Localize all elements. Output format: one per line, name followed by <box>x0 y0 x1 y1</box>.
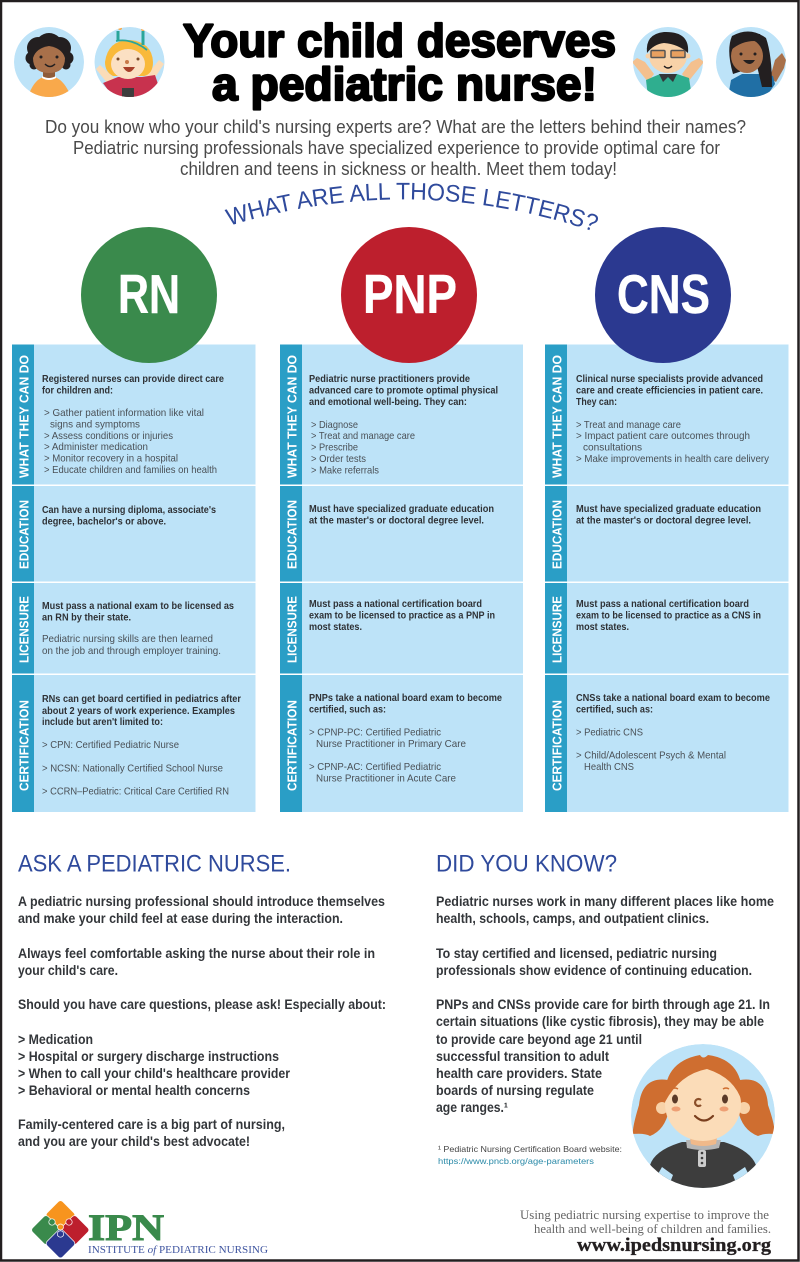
row: what they can do: > Impact patient care outcomes through <box>576 431 750 442</box>
section: ask a pediatric nurse: your child's care. <box>18 963 118 978</box>
title: Your child deserves <box>183 14 616 66</box>
section: did you know: to provide care beyond age 21 until <box>436 1032 642 1047</box>
row: education: Can have a nursing diploma, associate's <box>42 505 216 516</box>
panel: CNS column <box>545 344 788 812</box>
row: education: at the master's or doctoral degree level. <box>576 516 751 526</box>
row: what they can do: consultations <box>583 442 642 454</box>
row: certification: Nurse Practitioner in Primary Care <box>316 739 466 750</box>
row: licensure: most states. <box>309 622 362 633</box>
row: certification <box>545 675 788 812</box>
RN circle <box>81 227 217 363</box>
row: certification <box>12 675 256 812</box>
row: education: at the master's or doctoral degree level. <box>309 516 484 526</box>
row: certification: Nurse Practitioner in Acute Care <box>316 774 456 784</box>
section: ask a pediatric nurse: > When to call your child's healthcare provider <box>18 1066 291 1081</box>
footer tagline and website: health and well-being of children and families. <box>534 1222 771 1236</box>
title: a pediatric nurse! <box>212 58 597 110</box>
row: licensure: Must pass a national exam to be licensed as <box>42 601 234 612</box>
row: licensure: Must pass a national certification board <box>309 599 482 610</box>
row: what they can do: WHAT THEY CAN DO <box>18 355 32 478</box>
avatar: blonde child with headband <box>94 26 164 98</box>
row: education: EDUCATION <box>550 500 564 569</box>
section: ask a pediatric nurse: Always feel comfortable asking the nurse about their role in <box>18 946 375 961</box>
row: what they can do: Registered nurses can provide direct care <box>42 374 224 385</box>
row: certification: certified, such as: <box>309 704 386 716</box>
row: what they can do: for children and: <box>42 386 113 396</box>
row: what they can do: > Gather patient information like vital <box>44 408 204 419</box>
row: licensure: most states. <box>576 622 629 633</box>
section: did you know: health care providers. State <box>436 1066 602 1081</box>
row: what they can do: > Administer medication <box>44 442 148 453</box>
row: certification: > CPNP-PC: Certified Pediatric <box>309 728 441 738</box>
row: certification: CERTIFICATION <box>286 700 300 791</box>
section: ask a pediatric nurse: > Hospital or surgery discharge instructions <box>18 1049 279 1064</box>
logo: IPN <box>30 1199 268 1259</box>
PNP circle <box>341 227 477 363</box>
row: education: EDUCATION <box>286 500 300 569</box>
section: did you know: professionals show evidence of continuing education. <box>436 963 752 978</box>
section: ask a pediatric nurse: > Behavioral or mental health concerns <box>18 1083 250 1098</box>
row: licensure: LICENSURE <box>550 596 564 663</box>
section: did you know: health, schools, camps, and outpatient clinics. <box>436 911 709 926</box>
row: certification: about 2 years of work experience. Examples <box>42 706 235 717</box>
row: what they can do <box>12 344 256 484</box>
section: ask a pediatric nurse <box>18 850 386 1149</box>
section: ask a pediatric nurse: > Medication <box>18 1032 93 1047</box>
logo: IPN: IPN <box>88 1208 164 1249</box>
row: what they can do: Pediatric nurse practitioners provide <box>309 374 470 385</box>
row: certification: CERTIFICATION <box>550 700 564 791</box>
row: certification: > Child/Adolescent Psych & Mental <box>576 750 726 762</box>
row: licensure: Must pass a national certification board <box>576 599 749 610</box>
row: certification: > CCRN–Pediatric: Critical Care Certified RN <box>42 786 229 798</box>
footnote <box>438 1144 622 1166</box>
footnote: ¹ Pediatric Nursing Certification Board website: <box>438 1144 622 1154</box>
intro paragraph: children and teens in sickness or health. Meet them today! <box>180 158 617 179</box>
row: certification: > CPN: Certified Pediatric Nurse <box>42 740 179 751</box>
row: what they can do: Clinical nurse specialists provide advanced <box>576 374 763 385</box>
row: certification: Health CNS <box>584 762 634 773</box>
row: what they can do: WHAT THEY CAN DO <box>550 355 564 478</box>
row: education: degree, bachelor's or above. <box>42 516 166 528</box>
row: education <box>280 486 523 582</box>
section: did you know: To stay certified and licensed, pediatric nursing <box>436 946 717 961</box>
avatar: girl waving <box>716 27 786 97</box>
section: did you know: PNPs and CNSs provide care for birth through age 21. In <box>436 997 770 1012</box>
row: education <box>545 486 788 582</box>
row: education: EDUCATION <box>18 500 32 569</box>
row: what they can do: > Monitor recovery in a hospital <box>44 454 178 464</box>
title <box>183 14 616 110</box>
section: did you know: certain situations (like cystic fibrosis), they may be able <box>436 1014 764 1029</box>
PNP circle: PNP <box>363 263 457 325</box>
section: ask a pediatric nurse: Should you have care questions, please ask! Especially about: <box>18 997 386 1012</box>
row: what they can do: They can: <box>576 397 617 408</box>
section: did you know: successful transition to adult <box>436 1049 609 1064</box>
intro paragraph: Do you know who your child's nursing experts are? What are the letters behind their names? <box>45 116 746 137</box>
row: certification: PNPs take a national board exam to become <box>309 693 502 704</box>
row: what they can do <box>545 344 788 484</box>
intro paragraph <box>45 116 746 179</box>
row: licensure: on the job and through employer training. <box>42 646 221 657</box>
row: what they can do: > Diagnose <box>311 420 358 431</box>
section: ask a pediatric nurse: Family-centered care is a big part of nursing, <box>18 1117 285 1132</box>
footnote: https://www.pncb.org/age-parameters <box>438 1156 594 1166</box>
row: licensure <box>12 583 256 674</box>
row: what they can do: and emotional well-being. They can: <box>309 397 467 408</box>
row: what they can do: > Assess conditions or injuries <box>44 431 173 442</box>
section: ask a pediatric nurse: A pediatric nursing professional should introduce themselves <box>18 894 385 909</box>
row: what they can do: > Order tests <box>311 454 366 465</box>
row: licensure: LICENSURE <box>18 596 32 663</box>
row: what they can do <box>280 344 523 484</box>
row: licensure <box>545 583 788 674</box>
logo mark <box>30 1199 90 1259</box>
row: licensure <box>280 583 523 674</box>
CNS circle <box>595 227 731 363</box>
CNS circle: CNS <box>617 263 710 325</box>
section: did you know: Pediatric nurses work in many different places like home <box>436 894 774 909</box>
row: what they can do: > Prescribe <box>311 442 358 454</box>
logo: IPN: INSTITUTE of PEDIATRIC NURSING <box>88 1244 268 1256</box>
row: what they can do: WHAT THEY CAN DO <box>286 355 300 478</box>
row: certification: RNs can get board certified in pediatrics after <box>42 694 241 705</box>
section: did you know: boards of nursing regulate <box>436 1083 594 1098</box>
intro paragraph: Pediatric nursing professionals have specialized experience to provide optimal care for <box>73 137 720 158</box>
panel: PNP column <box>280 344 523 812</box>
row: certification: CERTIFICATION <box>18 700 32 791</box>
row: what they can do: > Treat and manage care <box>311 431 415 442</box>
section: ask a pediatric nurse: ASK A PEDIATRIC NURSE. <box>18 850 291 878</box>
row: what they can do: > Make improvements in health care delivery <box>576 454 770 465</box>
row: licensure: exam to be licensed to practice as a PNP in <box>309 610 495 622</box>
section: did you know: DID YOU KNOW? <box>436 850 617 878</box>
row: education <box>12 486 256 582</box>
footer tagline and website <box>520 1208 772 1256</box>
RN circle: RN <box>118 263 180 325</box>
row: what they can do: > Treat and manage care <box>576 420 681 431</box>
footer tagline and website: Using pediatric nursing expertise to improve the <box>520 1208 769 1222</box>
row: licensure: an RN by their state. <box>42 612 131 624</box>
row: what they can do: advanced care to promote optimal physical <box>309 386 498 396</box>
row: what they can do: > Educate children and families on health <box>44 465 217 476</box>
row: certification <box>280 675 523 812</box>
row: certification: > Pediatric CNS <box>576 728 643 738</box>
panel: RN column <box>12 344 256 812</box>
illustration: girl with pigtails <box>631 1044 775 1188</box>
row: licensure: LICENSURE <box>286 596 300 663</box>
row: licensure: exam to be licensed to practice as a CNS in <box>576 610 761 622</box>
row: certification: include but aren't limited to: <box>42 717 163 728</box>
footer tagline and website: www.ipedsnursing.org <box>577 1235 772 1256</box>
row: what they can do: > Make referrals <box>311 466 379 476</box>
row: what they can do: care and create efficiencies in patient care. <box>576 386 763 396</box>
row: what they can do: signs and symptoms <box>50 420 140 430</box>
row: certification: CNSs take a national board exam to become <box>576 693 770 704</box>
avatar: child with curly hair <box>14 27 84 97</box>
section: did you know <box>436 850 774 1115</box>
row: certification: > NCSN: Nationally Certified School Nurse <box>42 764 223 774</box>
avatar: boy with glasses <box>632 27 704 97</box>
row: licensure: Pediatric nursing skills are then learned <box>42 634 213 645</box>
row: certification: > CPNP-AC: Certified Pediatric <box>309 762 441 773</box>
section: did you know: age ranges.¹ <box>436 1100 508 1115</box>
row: education: Must have specialized graduate education <box>309 504 494 515</box>
row: certification: certified, such as: <box>576 704 653 716</box>
curved heading: WHAT ARE ALL THOSE LETTERS? <box>224 182 598 230</box>
section: ask a pediatric nurse: and make your child feel at ease during the interaction. <box>18 911 343 926</box>
section: ask a pediatric nurse: and you are your child's best advocate! <box>18 1134 250 1149</box>
row: education: Must have specialized graduate education <box>576 504 761 515</box>
